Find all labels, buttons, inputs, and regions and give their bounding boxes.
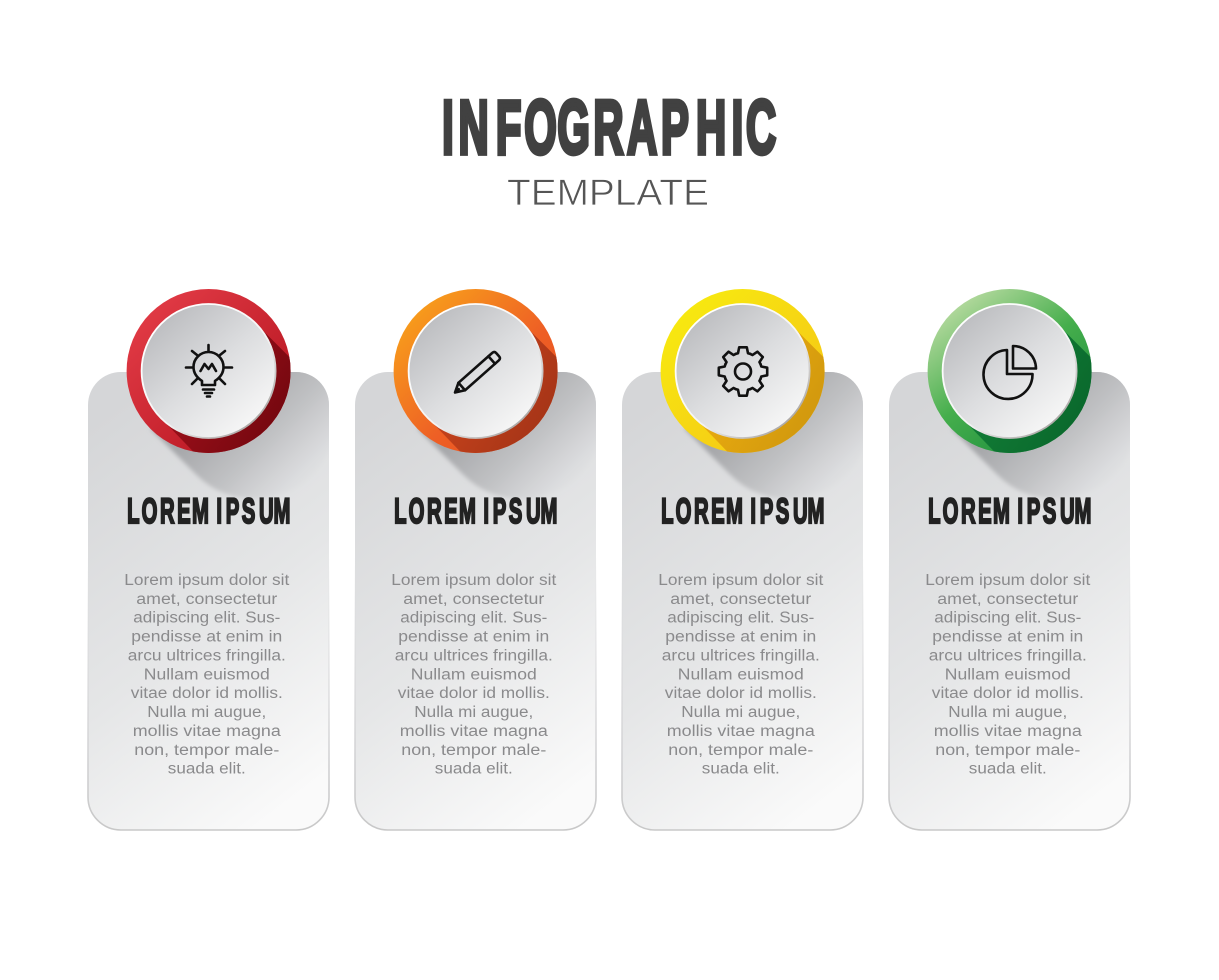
- body text: adipiscing elit. Sus-: [400, 610, 547, 627]
- card background: [355, 372, 596, 830]
- body text: [391, 572, 557, 778]
- card background: [889, 372, 1130, 830]
- body text: Nulla mi augue,: [414, 704, 533, 721]
- body text: mollis vitae magna: [934, 723, 1082, 740]
- subtitle: TEMPLATE: [507, 172, 709, 213]
- red ring badge: [126, 289, 291, 453]
- body text: amet, consectetur: [937, 591, 1078, 608]
- body text: mollis vitae magna: [400, 723, 548, 740]
- body text: suada elit.: [969, 761, 1047, 778]
- body text: vitae dolor id mollis.: [131, 685, 283, 702]
- body text: [658, 572, 824, 778]
- body text: amet, consectetur: [403, 591, 544, 608]
- body text: pendisse at enim in: [665, 629, 816, 646]
- icon: pencil: [452, 351, 501, 396]
- body text: Nulla mi augue,: [147, 704, 266, 721]
- panel: card 2 orange pencil: [355, 289, 604, 830]
- icon: gear: [719, 347, 767, 396]
- body text: Lorem ipsum dolor sit: [391, 572, 557, 589]
- body text: Lorem ipsum dolor sit: [925, 572, 1091, 589]
- body text: Lorem ipsum dolor sit: [658, 572, 824, 589]
- green ring badge: [928, 289, 1092, 453]
- card background: [622, 372, 863, 830]
- heading: LOREM IPSUM: [928, 492, 1091, 532]
- body text: Lorem ipsum dolor sit: [124, 572, 290, 589]
- body text: adipiscing elit. Sus-: [934, 610, 1081, 627]
- body text: non, tempor male-: [401, 742, 546, 759]
- body text: [925, 572, 1091, 778]
- body text: pendisse at enim in: [131, 629, 282, 646]
- body text: [124, 572, 290, 778]
- body text: non, tempor male-: [935, 742, 1080, 759]
- panel: card 4 green pie: [889, 289, 1138, 830]
- title: INFOGRAPHIC: [442, 84, 776, 170]
- body text: Nulla mi augue,: [681, 704, 800, 721]
- body text: Nullam euismod: [411, 666, 537, 683]
- panel: card 3 yellow gear: [622, 289, 871, 830]
- body text: suada elit.: [702, 761, 780, 778]
- body text: Nullam euismod: [945, 666, 1071, 683]
- body text: vitae dolor id mollis.: [932, 685, 1084, 702]
- yellow ring badge: [660, 289, 825, 453]
- body text: adipiscing elit. Sus-: [133, 610, 280, 627]
- heading: LOREM IPSUM: [661, 492, 824, 532]
- body text: mollis vitae magna: [667, 723, 815, 740]
- body text: arcu ultrices fringilla.: [128, 648, 286, 664]
- body text: arcu ultrices fringilla.: [395, 648, 553, 664]
- body text: Nullam euismod: [678, 666, 804, 683]
- body text: arcu ultrices fringilla.: [929, 648, 1087, 664]
- body text: suada elit.: [168, 761, 246, 778]
- icon: pie chart: [984, 346, 1036, 399]
- orange ring badge: [394, 289, 558, 453]
- body text: non, tempor male-: [668, 742, 813, 759]
- body text: vitae dolor id mollis.: [398, 685, 550, 702]
- panel: card 1 red idea: [88, 289, 337, 830]
- long shadow: [150, 372, 329, 498]
- body text: adipiscing elit. Sus-: [667, 610, 814, 627]
- card background: [88, 372, 329, 830]
- body text: arcu ultrices fringilla.: [662, 648, 820, 664]
- body text: suada elit.: [435, 761, 513, 778]
- body text: pendisse at enim in: [398, 629, 549, 646]
- body text: vitae dolor id mollis.: [665, 685, 817, 702]
- heading: LOREM IPSUM: [394, 492, 557, 532]
- body text: pendisse at enim in: [932, 629, 1083, 646]
- body text: amet, consectetur: [670, 591, 811, 608]
- icon: light bulb: [186, 345, 232, 396]
- body text: Nulla mi augue,: [948, 704, 1067, 721]
- body text: amet, consectetur: [136, 591, 277, 608]
- long shadow: [951, 372, 1130, 498]
- long shadow: [684, 372, 863, 498]
- body text: mollis vitae magna: [133, 723, 281, 740]
- heading: LOREM IPSUM: [127, 492, 290, 532]
- long shadow: [417, 372, 596, 498]
- body text: Nullam euismod: [144, 666, 270, 683]
- body text: non, tempor male-: [134, 742, 279, 759]
